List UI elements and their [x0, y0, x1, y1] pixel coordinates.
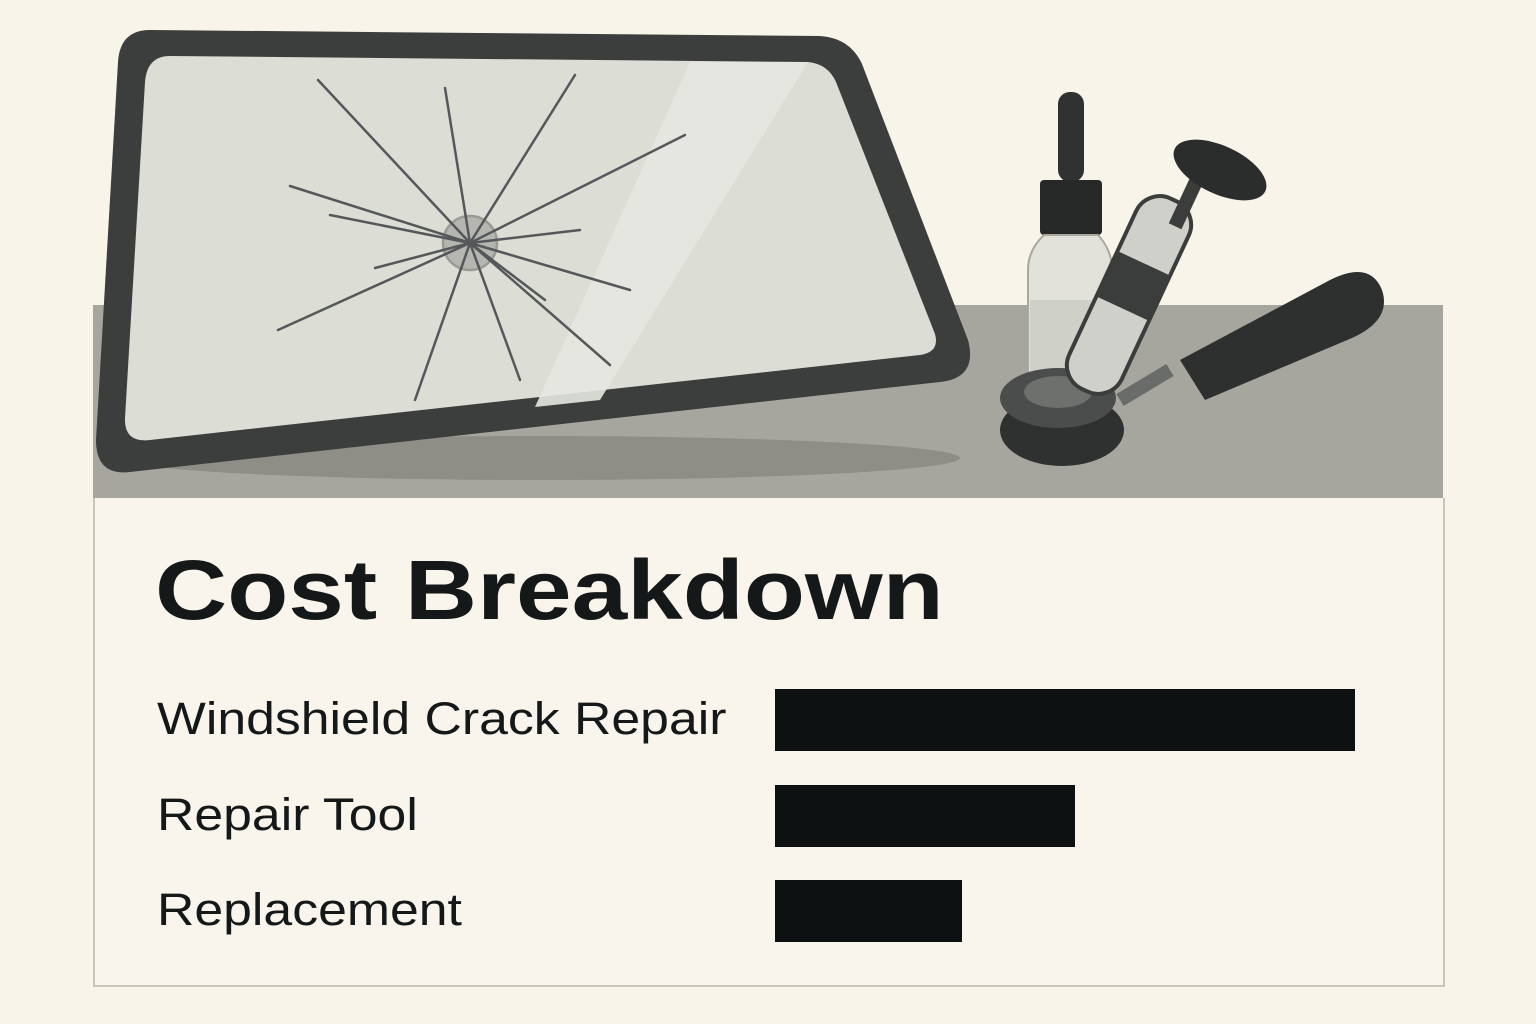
- label: repair tool: Repair Tool: [157, 789, 418, 840]
- bar: repair tool: [775, 785, 1075, 847]
- icon: screwdriver: [1120, 272, 1384, 400]
- label: replacement: Replacement: [157, 884, 462, 935]
- illustration: windshield and repair tools: [93, 30, 1443, 498]
- bar: replacement: [775, 880, 962, 942]
- icon: crack: [278, 75, 685, 400]
- title: Cost Breakdown: [155, 543, 944, 637]
- panel: cost breakdown: [93, 498, 1445, 987]
- label: windshield crack repair: Windshield Crack Repair: [157, 693, 726, 744]
- icon: repair injector: [1000, 127, 1275, 466]
- windshield: [96, 30, 970, 472]
- icon: resin bottle: [1028, 92, 1112, 382]
- counter: [93, 305, 1443, 500]
- bar: windshield crack repair: [775, 689, 1355, 751]
